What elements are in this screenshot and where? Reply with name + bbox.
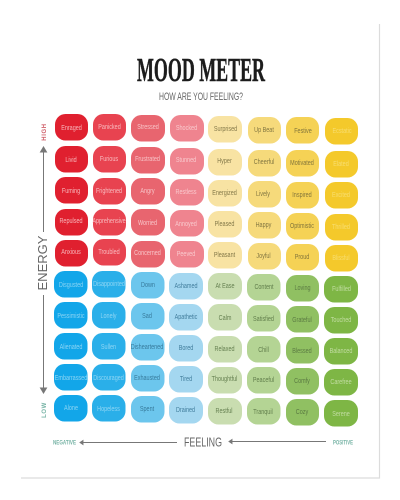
column 6 light yellow <box>248 117 281 270</box>
column 8 deep green: Touched <box>331 316 352 324</box>
right arrow <box>229 440 326 444</box>
column 7 yellow: Inspired <box>292 191 312 199</box>
column 5 pale yellow: Pleased <box>215 220 235 228</box>
column 2 red: Troubled <box>98 248 120 256</box>
column 3 red: Worried <box>138 219 157 227</box>
negative label: NEGATIVE <box>53 440 76 446</box>
column 8 gold <box>325 118 358 272</box>
column 6 light green: Content <box>254 283 274 291</box>
column 7 green: Comfy <box>294 377 311 385</box>
column 2 blue <box>92 271 126 422</box>
column 3 light blue: Sad <box>142 312 152 320</box>
column 8 deep green: Fulfilled <box>332 285 351 293</box>
column 4 pale blue: Tired <box>180 375 192 383</box>
column 6 light green <box>247 274 280 424</box>
column 4 pink: Peeved <box>177 250 196 258</box>
column 6 light yellow: Joyful <box>256 252 271 260</box>
column 4 pink: Annoyed <box>175 220 197 228</box>
column 1 red: Fuming <box>62 187 80 195</box>
column 5 pale green: Calm <box>219 314 231 322</box>
column 5 pale yellow: Hyper <box>217 157 233 165</box>
column 5 pale green: Thoughtful <box>212 375 237 383</box>
column 4 pale blue: Ashamed <box>174 282 198 290</box>
column 8 deep green: Carefree <box>330 378 352 386</box>
column 1 red: Livid <box>65 156 77 164</box>
column 4 pink <box>170 115 204 268</box>
column 3 red: Angry <box>140 187 155 195</box>
column 2 blue: Hopeless <box>97 405 120 413</box>
column 5 pale green: Relaxed <box>214 345 235 353</box>
column 3 light blue: Exhausted <box>134 374 160 382</box>
column 7 yellow: Proud <box>295 253 310 261</box>
column 5 pale green <box>208 273 242 424</box>
column 3 red: Frustrated <box>135 155 160 163</box>
column 8 gold: Blissful <box>332 254 350 262</box>
column 1 blue: Alienated <box>60 343 83 351</box>
column 7 yellow: Optimistic <box>290 222 315 230</box>
column 7 green <box>286 275 319 426</box>
column 5 pale green: Restful <box>216 407 232 415</box>
mood grid <box>54 114 358 426</box>
column 6 light yellow: Lively <box>256 190 271 198</box>
column 1 blue <box>54 271 88 422</box>
column 6 light yellow: Cheerful <box>254 158 274 166</box>
column 2 blue: Sullen <box>101 343 116 351</box>
column 4 pale blue <box>169 273 203 424</box>
column 3 light blue: Spent <box>140 405 154 413</box>
column 6 light yellow: Up Beat <box>254 126 274 134</box>
energy axis <box>35 123 50 418</box>
column 7 yellow <box>286 117 319 270</box>
column 1 blue: Disgusted <box>59 281 84 289</box>
column 7 green: Cozy <box>296 408 309 416</box>
column 6 light green: Satisfied <box>253 315 274 323</box>
column 2 red <box>92 114 126 266</box>
column 2 blue: Discouraged <box>93 374 124 382</box>
column 7 yellow: Motivated <box>290 159 314 167</box>
column 5 pale yellow: Pleasant <box>214 251 235 259</box>
column 3 red: Stressed <box>137 123 159 131</box>
title: MOOD METER <box>137 52 265 89</box>
column 4 pink: Shocked <box>176 124 198 132</box>
column 5 pale yellow: Surprised <box>214 125 238 133</box>
column 6 light green: Tranquil <box>253 408 273 416</box>
column 2 red: Panicked <box>98 123 121 131</box>
column 2 blue: Lonely <box>100 312 117 320</box>
column 3 red: Concerned <box>134 249 161 257</box>
column 7 green: Blessed <box>292 347 312 355</box>
column 7 green: Grateful <box>292 316 312 324</box>
column 6 light green: Peaceful <box>253 376 274 384</box>
column 5 pale green: At Ease <box>215 282 235 290</box>
column 2 blue: Disappointed <box>93 280 125 288</box>
feeling label: FEELING <box>184 434 222 450</box>
positive label: POSITIVE <box>333 440 353 446</box>
energy down arrow <box>40 295 46 393</box>
column 6 light green: Chill <box>258 346 269 354</box>
column 1 red: Repulsed <box>59 217 83 225</box>
column 2 red: Furious <box>100 155 118 163</box>
column 8 deep green: Serene <box>332 410 350 418</box>
column 3 light blue <box>131 272 164 422</box>
column 5 pale yellow <box>208 116 242 268</box>
column 2 red: Apprehensive <box>92 217 126 225</box>
column 3 light blue: Disheartened <box>131 343 164 351</box>
column 3 red <box>131 115 165 268</box>
column 1 blue: Embarrassed <box>55 374 88 382</box>
column 8 gold: Elated <box>333 160 349 168</box>
column 1 blue: Pessimistic <box>57 312 85 320</box>
column 1 blue: Alone <box>64 404 78 412</box>
column 8 gold: Excited <box>332 191 350 199</box>
column 8 gold: Thrilled <box>332 223 350 231</box>
column 4 pink: Stunned <box>176 156 197 164</box>
column 8 deep green <box>324 276 358 426</box>
energy up arrow <box>40 147 46 232</box>
energy label: ENERGY <box>35 235 50 290</box>
column 6 light yellow: Happy <box>256 221 272 229</box>
subtitle: HOW ARE YOU FEELING? <box>159 91 243 103</box>
column 2 red: Frightened <box>96 187 122 195</box>
column 5 pale yellow: Energized <box>212 189 237 197</box>
column 4 pale blue: Drained <box>176 406 195 414</box>
column 8 gold: Ecstatic <box>332 127 352 135</box>
column 4 pale blue: Bored <box>179 344 194 352</box>
column 7 green: Loving <box>294 284 311 292</box>
column 3 light blue: Down <box>141 281 155 289</box>
column 1 red <box>55 114 88 266</box>
column 4 pale blue: Apathetic <box>175 313 198 321</box>
column 4 pink: Restless <box>176 188 196 196</box>
left arrow <box>80 440 177 444</box>
high label: HIGH <box>42 123 48 141</box>
column 7 yellow: Festive <box>294 127 312 135</box>
column 1 red: Enraged <box>61 124 82 132</box>
low label: LOW <box>42 402 48 418</box>
column 1 red: Anxious <box>61 248 81 256</box>
feeling axis <box>53 434 353 450</box>
column 8 deep green: Balanced <box>330 347 353 355</box>
